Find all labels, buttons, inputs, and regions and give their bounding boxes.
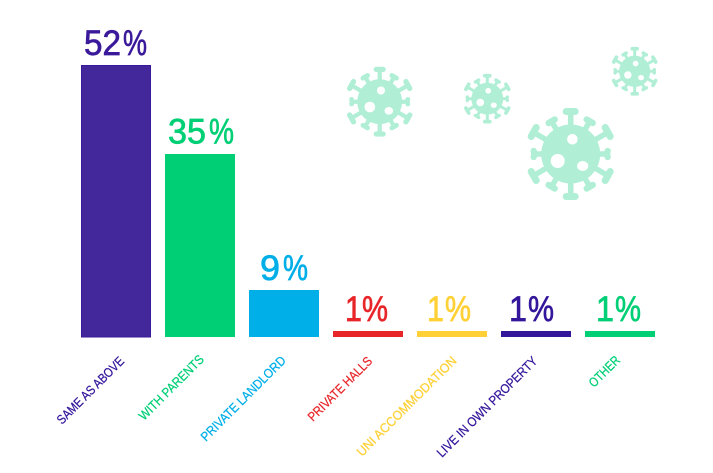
bar: private landlord [198, 249, 319, 444]
bar: with parents: 35 [168, 112, 206, 152]
bar: private landlord: 9 [260, 249, 280, 288]
icon: virus top right [614, 49, 656, 94]
bar: same as above [54, 24, 150, 427]
bar: other: OTHER [586, 353, 623, 390]
bar: uni accommodation: % [445, 290, 471, 329]
bar: with parents: % [209, 112, 234, 152]
bar: private halls: % [362, 290, 388, 329]
bar: private landlord: PRIVATE LANDLORD [198, 353, 289, 444]
bar: other: % [615, 290, 641, 329]
bar: same as above: SAME AS ABOVE [54, 353, 127, 427]
bar: uni accommodation: UNI ACCOMMODATION [354, 353, 460, 459]
bar: private halls: PRIVATE HALLS [305, 353, 375, 424]
bar: live in own property [434, 290, 571, 460]
bar: live in own property: LIVE IN OWN PROPERTY [434, 353, 540, 460]
icon: virus top centre-left [350, 69, 410, 134]
bar: with parents: WITH PARENTS [136, 352, 207, 423]
icon: large virus [531, 112, 610, 196]
bar: live in own property: % [528, 290, 554, 329]
bar: other [585, 290, 655, 390]
bar: private halls: 1 [345, 290, 362, 329]
bar: uni accommodation: 1 [427, 290, 444, 329]
bar: private landlord: % [283, 249, 308, 288]
bar: uni accommodation [354, 290, 487, 459]
bar: with parents [136, 112, 235, 423]
bar: same as above: % [123, 24, 147, 63]
bar: same as above: 52 [84, 24, 121, 63]
bar: private halls [305, 290, 403, 424]
bar: other: 1 [596, 290, 614, 329]
icon: virus top centre [466, 76, 509, 122]
bar: live in own property: 1 [509, 290, 527, 329]
